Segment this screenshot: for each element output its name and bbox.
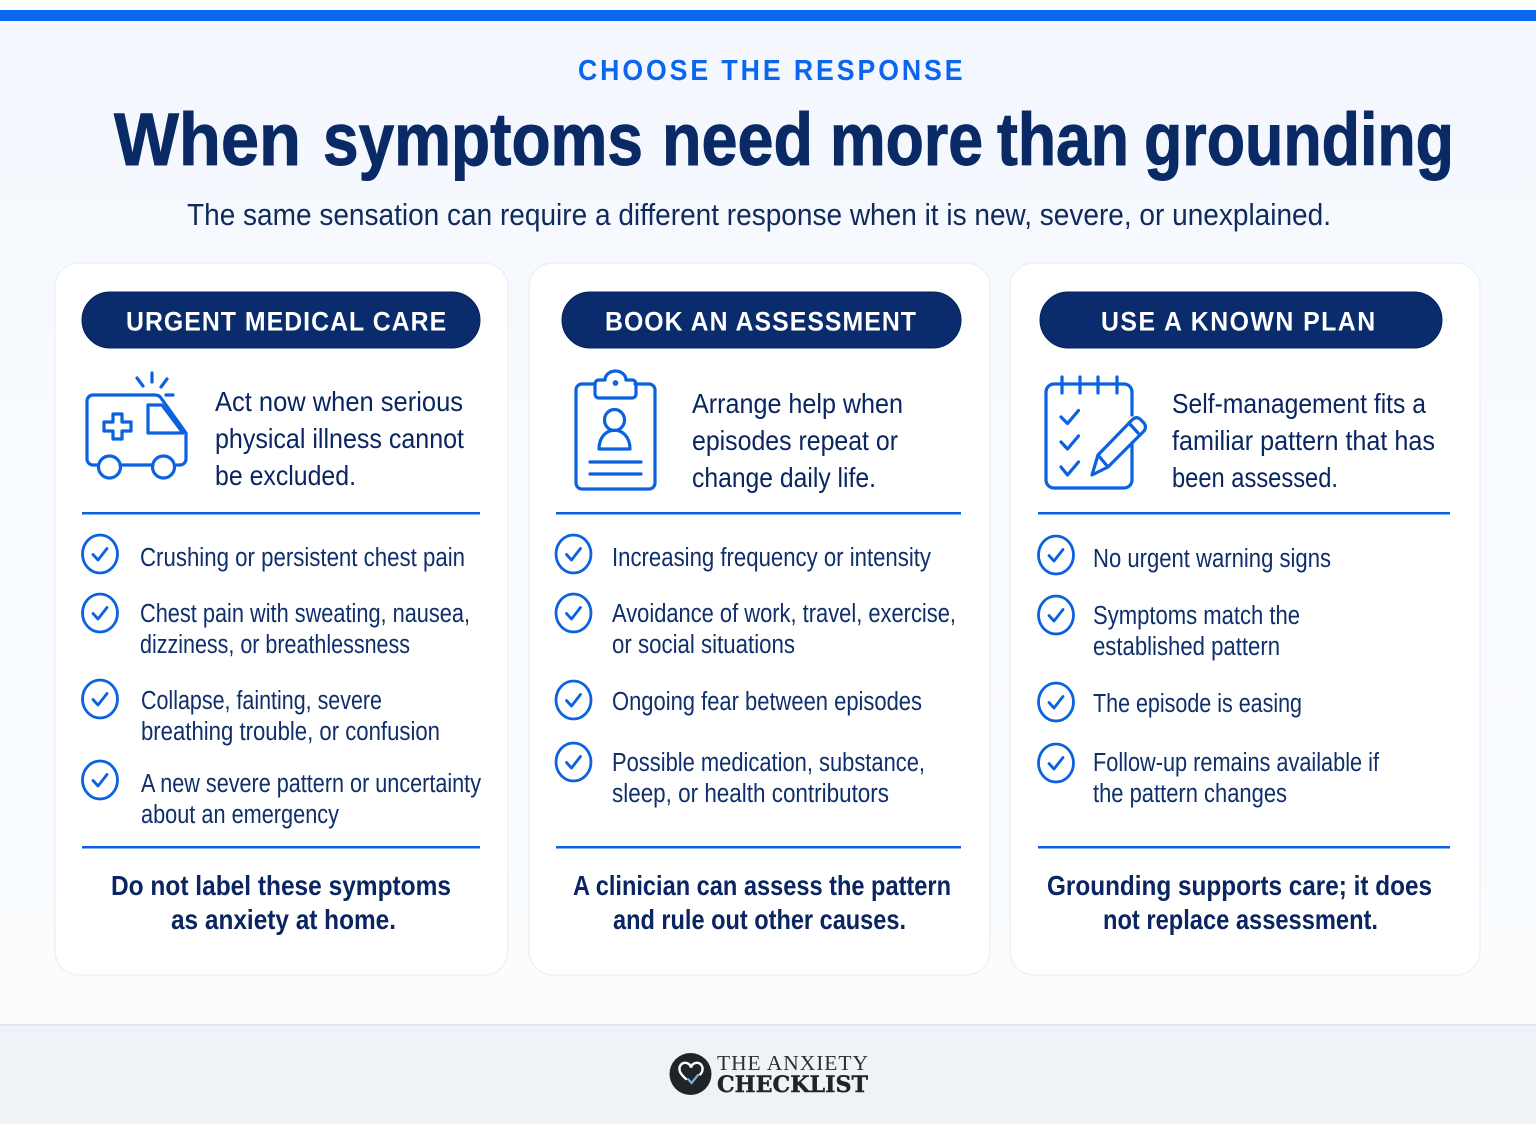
list item 4: [556, 743, 925, 808]
list item 2: Avoidance of work, travel, exercise,: [612, 600, 956, 628]
title: symptoms: [323, 98, 643, 181]
footer logo: CHECKLIST: [717, 1072, 869, 1098]
list item 1: Increasing frequency or intensity: [612, 544, 931, 572]
pill heading: urgent medical care: [82, 292, 480, 348]
title: [114, 98, 1454, 181]
summary text: [692, 388, 903, 493]
icon: clipboard with person: [576, 371, 655, 489]
list item 3: Collapse, fainting, severe: [141, 687, 382, 715]
pill heading: urgent medical care: URGENT MEDICAL CARE: [126, 308, 446, 337]
list item 4: Follow-up remains available if: [1093, 749, 1380, 777]
summary text: change daily life.: [692, 462, 876, 493]
summary text: Self-management fits a: [1172, 388, 1427, 419]
closing note: [111, 870, 451, 935]
title: grounding: [1144, 98, 1454, 181]
list item 1: Crushing or persistent chest pain: [140, 544, 465, 572]
list item 4: sleep, or health contributors: [612, 780, 889, 808]
list item 1: [82, 535, 465, 573]
list item 4: about an emergency: [141, 801, 339, 829]
summary text: Arrange help when: [692, 388, 903, 419]
list item 2: [1038, 596, 1300, 661]
list item 2: Chest pain with sweating, nausea,: [140, 600, 470, 628]
closing note: A clinician can assess the pattern: [573, 870, 951, 901]
summary text: Act now when serious: [215, 386, 463, 417]
pill heading: book an assessment: [562, 292, 961, 348]
pill heading: book an assessment: BOOK AN ASSESSMENT: [605, 308, 916, 337]
summary text: been assessed.: [1172, 462, 1338, 493]
summary text: familiar pattern that has: [1172, 425, 1435, 456]
closing note: Do not label these symptoms: [111, 870, 451, 901]
list item 1: [1038, 536, 1331, 574]
list item 1: No urgent warning signs: [1093, 545, 1331, 573]
footer logo: [670, 1051, 869, 1098]
title: When: [114, 98, 301, 181]
closing note: and rule out other causes.: [613, 904, 906, 935]
title: than: [997, 98, 1129, 181]
summary text: be excluded.: [215, 460, 356, 491]
list item 2: [556, 594, 956, 659]
pill heading: use a known plan: [1040, 292, 1442, 348]
list item 3: breathing trouble, or confusion: [141, 718, 440, 746]
pill heading: use a known plan: USE A KNOWN PLAN: [1101, 308, 1375, 337]
list item 3: The episode is easing: [1093, 690, 1302, 718]
list item 4: Possible medication, substance,: [612, 749, 925, 777]
summary text: [1172, 388, 1435, 493]
panel: urgent medical care: [55, 263, 508, 975]
summary text: episodes repeat or: [692, 425, 898, 456]
eyebrow: choose the response: CHOOSE THE RESPONSE: [578, 54, 963, 86]
list item 2: established pattern: [1093, 633, 1280, 661]
summary text: [215, 386, 464, 491]
list item 3: [556, 681, 922, 719]
closing note: [1047, 870, 1432, 935]
list item 2: dizziness, or breathlessness: [140, 631, 410, 659]
panel: book an assessment: [529, 263, 990, 975]
list item 4: [82, 761, 481, 829]
list item 2: [82, 594, 470, 659]
top accent bar: [0, 10, 1536, 21]
closing note: as anxiety at home.: [171, 904, 396, 935]
closing note: Grounding supports care; it does: [1047, 870, 1432, 901]
icon: ambulance: [87, 373, 186, 478]
icon: checklist with pencil: [1046, 377, 1146, 488]
list item 1: [556, 535, 931, 573]
closing note: [573, 870, 951, 935]
list item 3: [1038, 683, 1302, 721]
footer band: [0, 1024, 1536, 1124]
title: more: [830, 98, 983, 181]
footer logo: THE ANXIETY: [717, 1051, 868, 1075]
list item 4: the pattern changes: [1093, 780, 1287, 808]
list item 2: or social situations: [612, 631, 795, 659]
subtitle: The same sensation can require a different response when it is new, severe, or unexplained.: [187, 197, 1331, 232]
panel: use a known plan: [1010, 263, 1480, 975]
title: need: [662, 98, 813, 181]
list item 2: Symptoms match the: [1093, 602, 1300, 630]
closing note: not replace assessment.: [1103, 904, 1378, 935]
list item 3: Ongoing fear between episodes: [612, 688, 922, 716]
summary text: physical illness cannot: [215, 423, 464, 454]
list item 4: A new severe pattern or uncertainty: [141, 770, 481, 798]
list item 4: [1038, 744, 1380, 808]
list item 3: [82, 680, 440, 746]
